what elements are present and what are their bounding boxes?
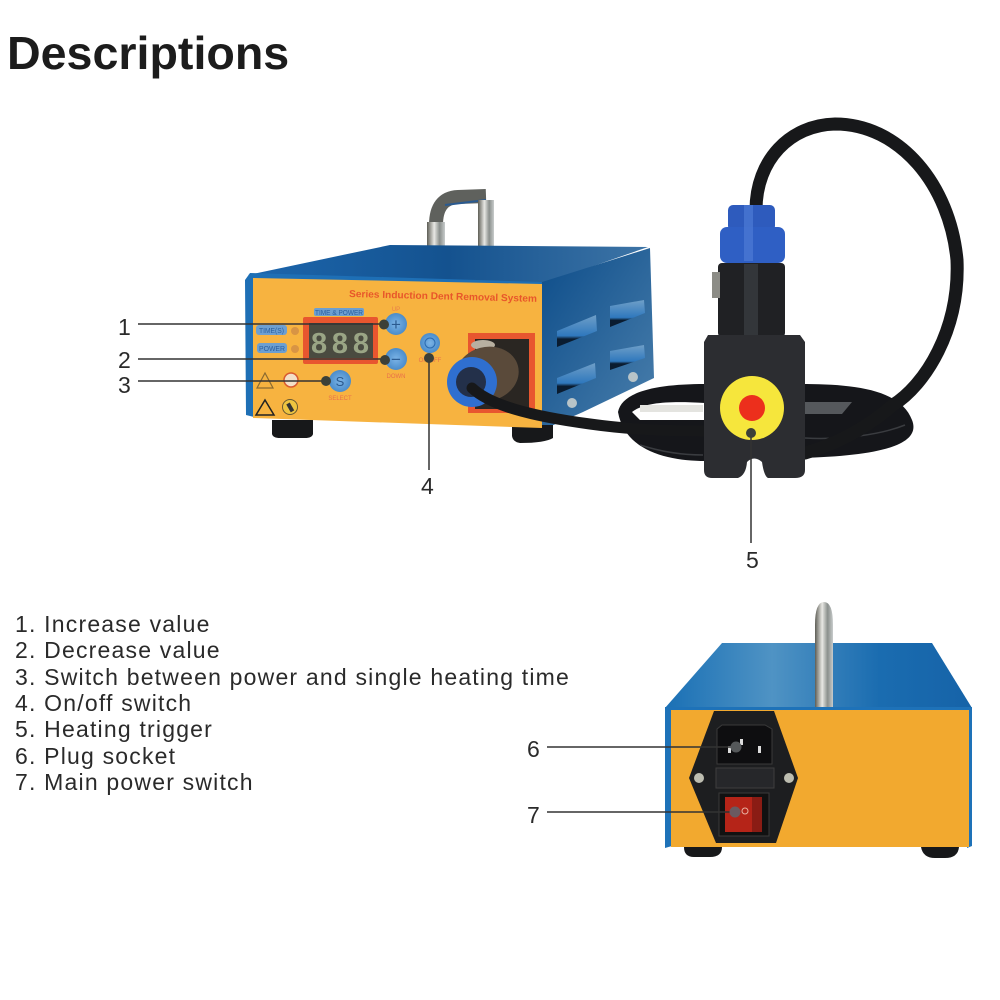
front view device photo	[245, 124, 957, 478]
cable from socket	[472, 388, 720, 431]
front panel: UP	[392, 307, 400, 313]
legend list	[15, 611, 570, 795]
legend list: 5. Heating trigger	[15, 716, 213, 742]
title: Descriptions	[7, 27, 289, 79]
callout 6	[527, 736, 742, 762]
front panel	[245, 273, 542, 428]
buttons	[385, 313, 407, 335]
rear edges	[665, 707, 972, 848]
legend list: 7. Main power switch	[15, 769, 254, 795]
front panel: ON/OFF	[419, 358, 442, 364]
rear top	[665, 643, 972, 708]
callout 3: 3	[118, 372, 131, 398]
connector socket	[468, 333, 535, 413]
front panel: TIME(S)	[259, 328, 284, 335]
blue connector and black grip	[712, 205, 785, 337]
legend list: 3. Switch between power and single heating time	[15, 664, 570, 690]
callout 1: 1	[118, 314, 131, 340]
callout 7: 7	[527, 802, 540, 828]
front panel: POWER	[259, 346, 285, 353]
legend list: 1. Increase value	[15, 611, 211, 637]
front panel: S	[336, 374, 345, 389]
rear feet	[684, 847, 722, 857]
time and power label	[314, 308, 364, 316]
legend list: 6. Plug socket	[15, 743, 176, 769]
callout 4: 4	[421, 473, 434, 499]
upper looping cable	[756, 124, 957, 453]
legend list: 2. Decrease value	[15, 637, 221, 663]
plug socket	[717, 725, 772, 764]
socket plate	[689, 711, 798, 843]
heating trigger handle	[704, 335, 805, 478]
time and power indicators	[256, 325, 287, 335]
rear face	[671, 710, 969, 847]
front panel: TIME & POWER	[315, 310, 363, 317]
screws	[694, 773, 704, 783]
front panel: SELECT	[328, 396, 352, 402]
callout 1	[118, 314, 389, 340]
callout 4	[421, 353, 434, 499]
front panel: −	[391, 350, 401, 369]
rear handle	[815, 602, 833, 708]
callout 3	[118, 372, 331, 398]
front panel: DOWN	[386, 374, 406, 380]
callout 7	[527, 802, 740, 828]
callout 2: 2	[118, 347, 131, 373]
front panel: +	[391, 315, 401, 334]
legend list: 4. On/off switch	[15, 690, 192, 716]
front panel: 888	[311, 328, 369, 360]
power rocker switch	[719, 793, 769, 836]
right side panel with vents	[542, 248, 654, 430]
callout 6: 6	[527, 736, 540, 762]
panel heading: Series Induction Dent Removal System	[349, 289, 537, 305]
coiled cable behind trigger	[618, 384, 913, 461]
warning icons	[257, 373, 273, 388]
rear view device photo	[665, 602, 972, 858]
callout 5: 5	[746, 547, 759, 573]
feet	[272, 420, 313, 438]
display	[303, 317, 378, 364]
callout 5	[746, 428, 759, 573]
fuse holder	[716, 768, 774, 788]
handle	[427, 196, 494, 282]
top of case	[248, 245, 648, 284]
callout 2	[118, 347, 390, 373]
